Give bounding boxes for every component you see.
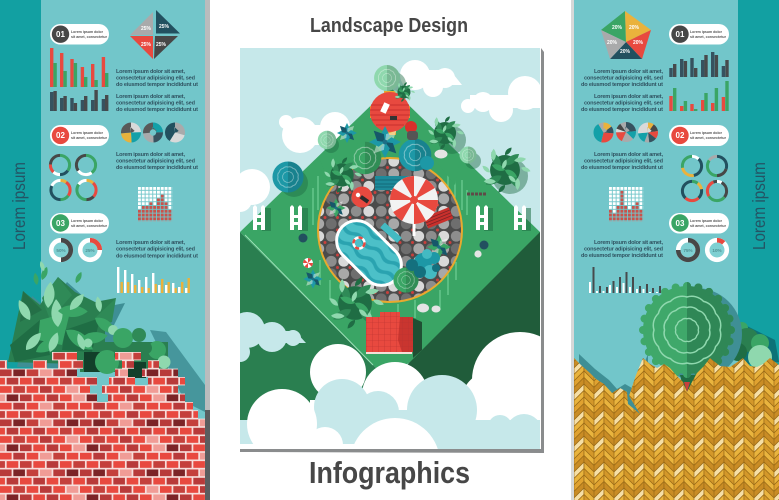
right badge 01: sit amet, consectetur — [690, 35, 727, 39]
red table — [352, 186, 372, 208]
right panel background — [571, 0, 779, 500]
left text block two — [116, 94, 198, 113]
left badge 01: 01 — [56, 30, 65, 39]
left badge 01 — [50, 24, 109, 44]
bench — [375, 176, 412, 190]
patio — [317, 157, 463, 303]
right pentagon chart — [601, 11, 651, 59]
title: Landscape Design — [310, 15, 468, 37]
red white beach ball — [303, 258, 313, 268]
teal mat — [380, 222, 402, 243]
left donut 50 percent — [51, 240, 71, 260]
right text block two: Lorem ipsum dolor sit amet, — [594, 94, 663, 100]
right dark bar chart — [669, 52, 729, 77]
right badge 02: 02 — [676, 131, 685, 140]
right ground shadow — [579, 354, 648, 416]
garden right side — [408, 232, 540, 385]
sky — [240, 48, 540, 368]
right text block four: consectetur adipisicing elit, sed — [584, 246, 664, 252]
right bushes — [724, 318, 779, 369]
right text block two: do eiusmod tempor incididunt ut — [581, 107, 663, 113]
right pentagon chart: 20% — [629, 25, 640, 31]
back white clouds — [310, 332, 540, 420]
left diamond chart: 25% — [156, 42, 167, 48]
right pixel grid chart — [609, 187, 643, 221]
left panel background — [0, 0, 210, 500]
right donut 10 percent — [707, 240, 727, 260]
garden trees — [374, 65, 400, 91]
left badge 01: Lorem ipsum dolor — [71, 30, 104, 34]
left red and green bar chart — [50, 48, 108, 87]
right white and dark bar chart — [589, 267, 661, 293]
left badge 01: sit amet, consectetur — [71, 35, 108, 39]
garden left side — [240, 232, 376, 420]
right large tree — [643, 286, 742, 395]
poster shadow — [240, 48, 544, 453]
front white clouds — [240, 389, 438, 449]
left text block one — [116, 69, 198, 88]
right text block four — [581, 240, 664, 259]
left brick wall — [0, 352, 210, 500]
left donut 25 percent — [80, 240, 100, 260]
left text block two: Lorem ipsum dolor sit amet, — [116, 94, 185, 100]
left edge highlight — [245, 235, 373, 365]
star plants — [337, 123, 357, 143]
right text block three: consectetur adipisicing elit, sed — [584, 158, 664, 164]
pool — [335, 219, 403, 287]
right badge 02 — [669, 125, 729, 146]
left badge 03 — [50, 213, 109, 234]
left ring charts — [50, 155, 96, 200]
right badge 03: sit amet, consectetur — [690, 224, 727, 228]
upper clouds — [228, 60, 542, 212]
umbrella — [390, 176, 438, 236]
right badge 03: Lorem ipsum dolor — [690, 219, 723, 223]
gazebo — [370, 91, 410, 135]
right donut 75 percent: 75% — [683, 248, 693, 253]
right badge 03 — [669, 213, 729, 234]
right badge 02: sit amet, consectetur — [690, 136, 727, 140]
right badge 01: 01 — [676, 30, 685, 39]
light blue cloud — [240, 375, 542, 450]
left text block three: consectetur adipisicing elit, sed — [116, 158, 196, 164]
left donut 25 percent: 25% — [85, 248, 95, 253]
garden shrubs — [394, 82, 415, 102]
grass stripes — [313, 170, 467, 320]
left text block one: consectetur adipisicing elit, sed — [116, 76, 196, 82]
left vertical heading: Lorem ipsum — [9, 162, 29, 250]
left badge 03: 03 — [56, 219, 65, 228]
right pentagon chart: 20% — [612, 25, 623, 31]
right text block two: consectetur adipisicing elit, sed — [584, 100, 664, 106]
red cap and rocks — [298, 121, 488, 312]
left badge 03: Lorem ipsum dolor — [71, 219, 104, 223]
left text block three: Lorem ipsum dolor sit amet, — [116, 152, 185, 158]
left text block one: Lorem ipsum dolor sit amet, — [116, 69, 185, 75]
left side cloud — [240, 312, 306, 362]
right red and green bar chart — [669, 81, 729, 111]
pool ring float — [354, 238, 364, 248]
right text block one — [581, 69, 664, 88]
left pixel grid chart — [138, 187, 172, 221]
right pentagon chart: 20% — [607, 40, 618, 46]
poster illustration — [240, 48, 540, 449]
right text block one: consectetur adipisicing elit, sed — [584, 76, 664, 82]
right badge 03: 03 — [676, 219, 685, 228]
right pentagon chart: 20% — [633, 40, 644, 46]
left diamond chart: 25% — [159, 24, 170, 30]
left ivy plant — [8, 261, 205, 412]
right pentagon chart: 20% — [620, 49, 631, 55]
subtitle: Infographics — [309, 455, 470, 490]
garden diamond top face — [240, 87, 540, 382]
right text block three — [581, 152, 664, 171]
left text block four: Lorem ipsum dolor sit amet, — [116, 240, 185, 246]
right badge 02: Lorem ipsum dolor — [690, 131, 723, 135]
right vertical heading: Lorem ipsum — [749, 162, 769, 250]
left diamond chart — [130, 10, 180, 59]
white fences — [253, 205, 531, 231]
right text block three: do eiusmod tempor incididunt ut — [581, 165, 663, 171]
right text block four: do eiusmod tempor incididunt ut — [581, 253, 663, 259]
teal bush cluster — [406, 156, 440, 279]
left badge 02: 02 — [56, 131, 65, 140]
left badge 02: sit amet, consectetur — [71, 136, 108, 140]
left text block four: consectetur adipisicing elit, sed — [116, 247, 196, 253]
tree shadows — [280, 72, 528, 197]
left text block two: consectetur adipisicing elit, sed — [116, 100, 196, 106]
left diamond chart: 25% — [141, 26, 152, 32]
right ring charts — [682, 156, 727, 201]
left donut 50 percent: 50% — [56, 248, 66, 253]
left text block four — [116, 240, 198, 260]
right pie charts — [598, 127, 653, 138]
right woven parquet ground — [574, 358, 779, 500]
right donut 10 percent: 10% — [712, 248, 722, 253]
right text block one: do eiusmod tempor incididunt ut — [581, 82, 663, 88]
right badge 01: Lorem ipsum dolor — [690, 30, 723, 34]
right text block one: Lorem ipsum dolor sit amet, — [594, 69, 663, 75]
left badge 02: Lorem ipsum dolor — [71, 131, 104, 135]
right text block three: Lorem ipsum dolor sit amet, — [594, 152, 663, 158]
left badge 03: sit amet, consectetur — [71, 224, 108, 228]
left text block three — [116, 152, 198, 171]
right text block two — [581, 94, 664, 113]
right text block four: Lorem ipsum dolor sit amet, — [594, 240, 663, 246]
left text block three: do eiusmod tempor incididunt ut — [116, 165, 198, 171]
left dark bar chart — [50, 90, 108, 111]
left text block four: do eiusmod tempor incididunt ut — [116, 254, 198, 260]
left pie charts — [126, 128, 180, 138]
left text block two: do eiusmod tempor incididunt ut — [116, 107, 198, 113]
left diamond chart: 25% — [141, 42, 152, 48]
right badge 01 — [669, 24, 729, 44]
red lounger — [424, 207, 453, 228]
left text block one: do eiusmod tempor incididunt ut — [116, 82, 198, 88]
right donut 75 percent — [678, 240, 698, 260]
left white and yellow bar chart — [117, 267, 190, 293]
left badge 02 — [50, 125, 109, 146]
house roof — [366, 312, 422, 358]
